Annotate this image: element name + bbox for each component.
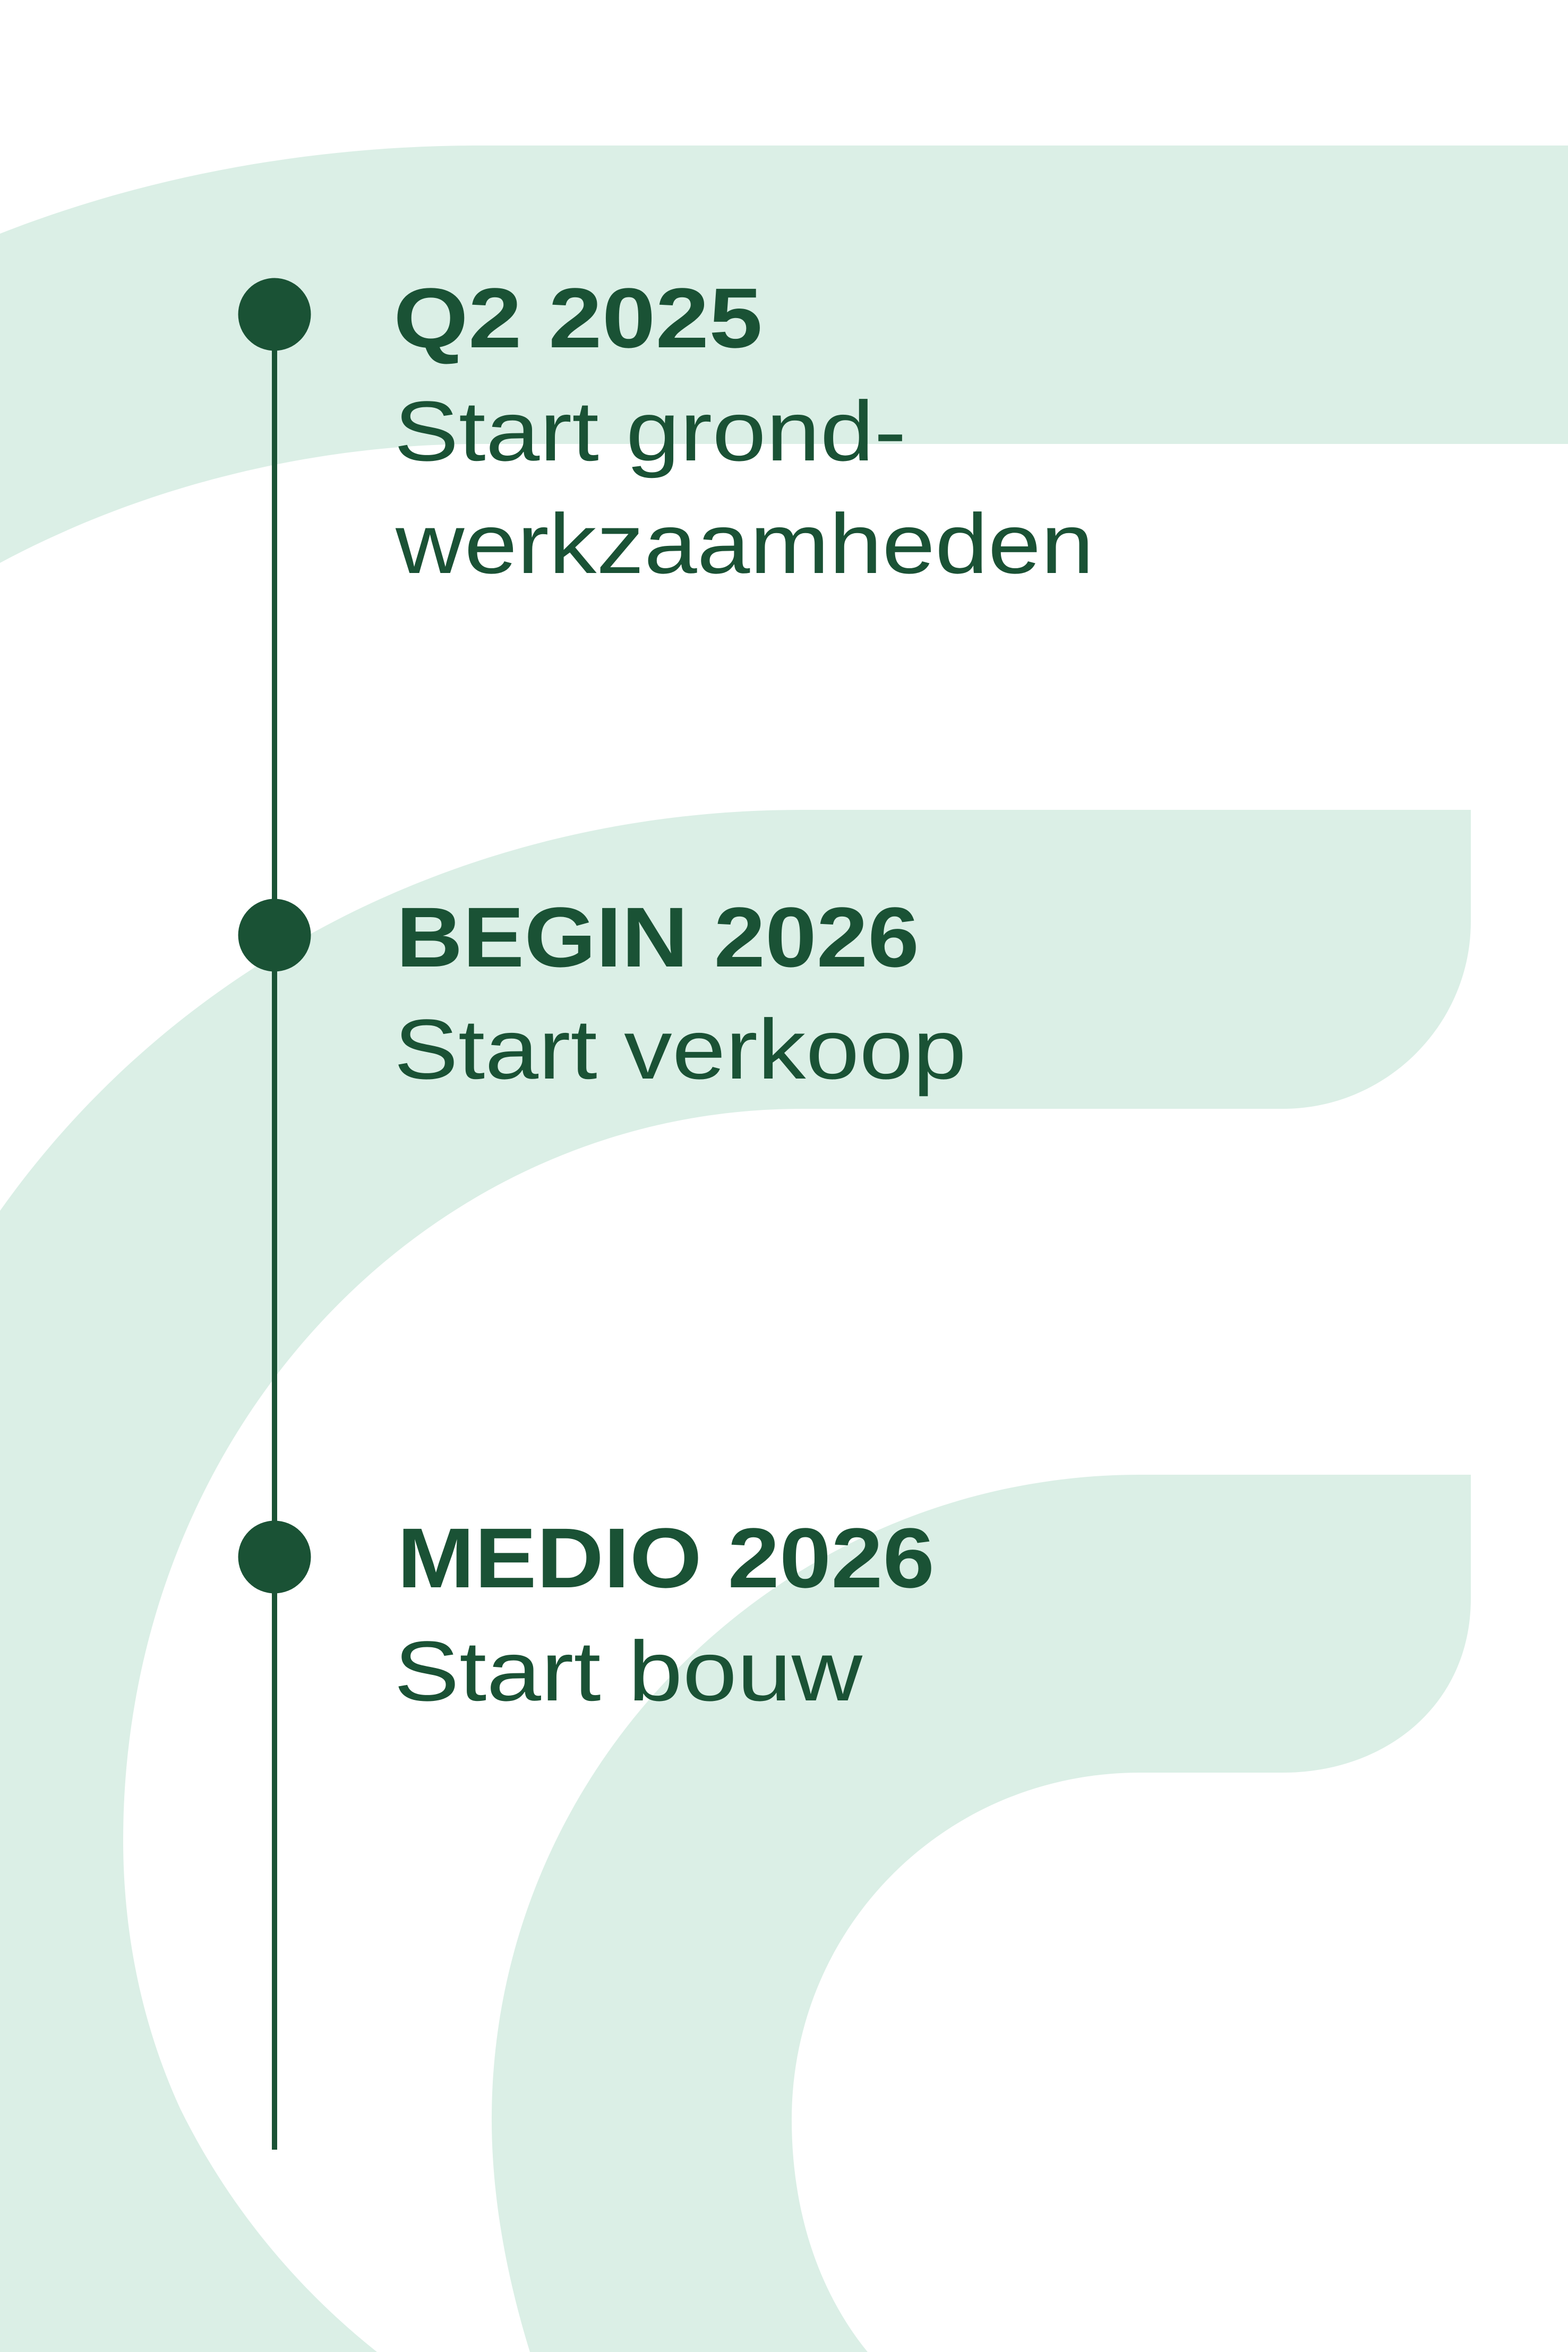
marker dot	[238, 899, 311, 972]
milestone: Begin 2026	[238, 890, 966, 1097]
description: Start grond-	[394, 383, 906, 478]
date heading: Q2 2025	[393, 270, 762, 365]
background shape: bottom band	[492, 1475, 1471, 2352]
milestone: Medio 2026	[238, 1510, 935, 1718]
description: Start verkoop	[394, 1002, 966, 1097]
timeline vertical line	[272, 314, 277, 2150]
milestone: Q2 2025	[238, 270, 1094, 591]
marker dot	[238, 1521, 311, 1593]
background shape: top band	[0, 146, 1568, 563]
date heading: MEDIO 2026	[397, 1510, 935, 1605]
date heading: BEGIN 2026	[396, 890, 919, 985]
description: Start bouw	[394, 1623, 863, 1718]
marker dot	[238, 278, 311, 350]
description: werkzaamheden	[395, 496, 1094, 591]
background shape: middle band	[0, 810, 1471, 2352]
